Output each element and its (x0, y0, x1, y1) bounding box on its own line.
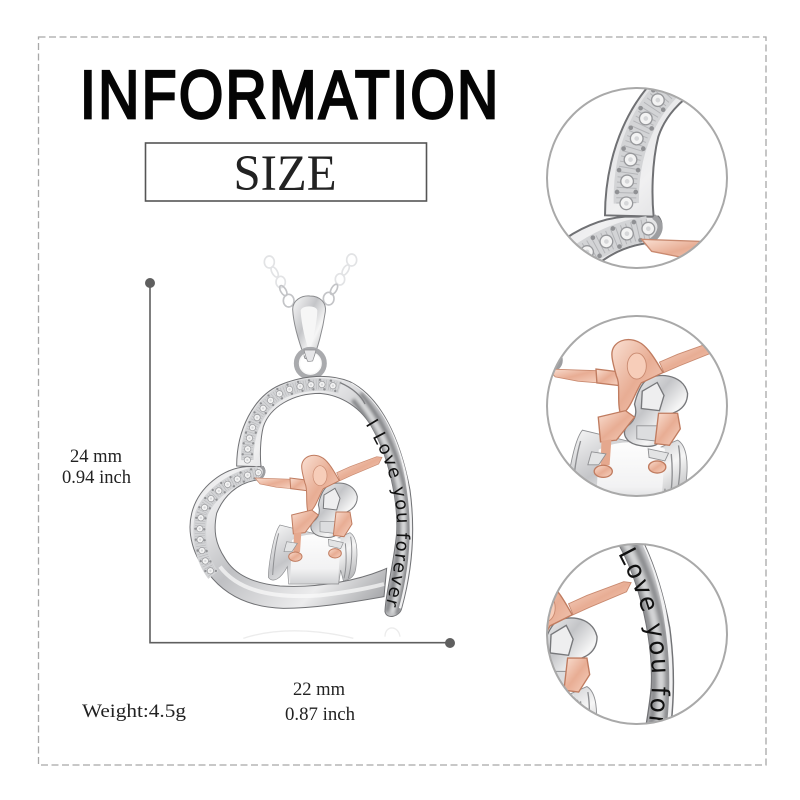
width label (285, 680, 355, 725)
detail circle: figures (546, 315, 728, 497)
title: INFORMATION (80, 57, 501, 133)
engraving: I Love you forever (366, 418, 410, 608)
detail circle: engraving: I Love you forever (619, 547, 670, 720)
height label: 0.94 inch (62, 468, 131, 488)
heart frame (190, 376, 413, 616)
weight label: Weight:4.5g (82, 702, 186, 722)
height label: 24 mm (70, 447, 123, 467)
mother and child figure (255, 455, 382, 584)
pendant necklace (190, 253, 414, 639)
height label (62, 447, 131, 488)
width label: 0.87 inch (285, 705, 355, 725)
width label: 22 mm (293, 680, 346, 700)
detail circle: gemstone band (546, 87, 728, 269)
chain and bail (264, 254, 357, 377)
size heading box (146, 143, 426, 202)
dimension axes (145, 278, 455, 648)
detail circle: engraving (546, 543, 728, 725)
reflection (243, 628, 400, 638)
size heading box: SIZE (234, 146, 336, 202)
